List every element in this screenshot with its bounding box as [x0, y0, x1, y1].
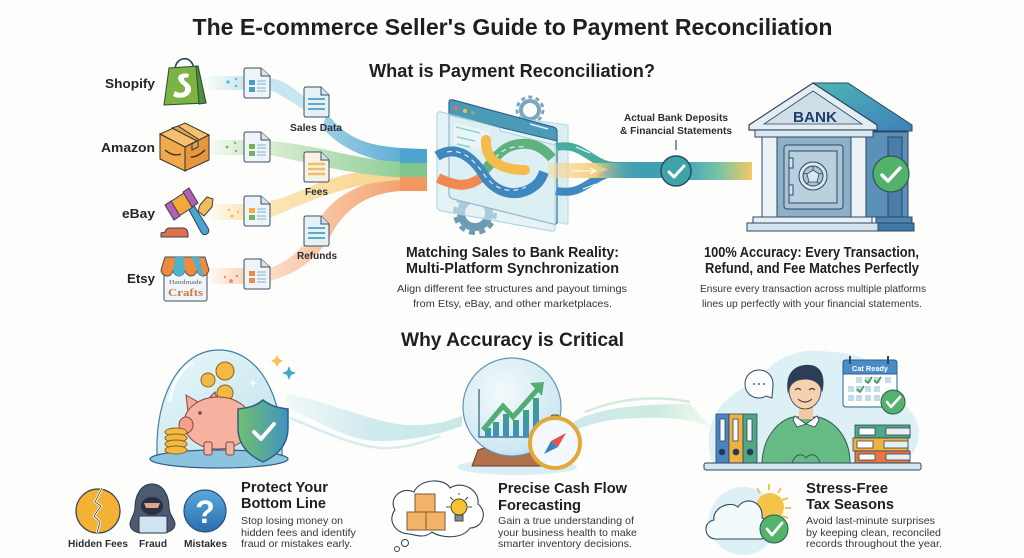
heading block: accuracy: 100% Accuracy: Every Transaction, — [704, 245, 919, 261]
illustration: relaxed person at desk — [704, 351, 921, 470]
person — [762, 365, 850, 463]
panel: reconciliation software window — [437, 100, 568, 231]
heading block: precise cash flow forecasting — [498, 480, 627, 514]
compass — [530, 415, 580, 468]
blue road — [437, 151, 544, 193]
dots: data particles — [224, 78, 239, 283]
data flow streams — [208, 76, 427, 284]
text: forecast description: smarter inventory decisions. — [498, 538, 632, 550]
dome base — [150, 450, 288, 468]
text: matching sales description: from Etsy, eBay, and other marketplaces. — [413, 298, 612, 310]
illustration: piggy bank under glass dome — [150, 350, 296, 468]
icon: bank building — [747, 83, 914, 231]
gear: bottom — [455, 193, 495, 233]
yellow road — [486, 140, 525, 170]
heading block: precise cash flow forecasting: Forecasting — [498, 497, 581, 514]
sparkles — [249, 355, 296, 387]
label: mistakes: Mistakes — [184, 539, 227, 550]
icon: checkpoint check — [661, 156, 691, 186]
calendar title: Cat Ready — [852, 366, 888, 373]
label: Shopify: Shopify — [105, 76, 156, 91]
heading: what is payment reconciliation: What is Payment Reconciliation? — [369, 61, 655, 81]
stacked books — [853, 425, 910, 463]
text: tax description — [806, 515, 942, 550]
heading block: precise cash flow forecasting: Precise Cash Flow — [498, 480, 627, 497]
heading block: matching sales — [406, 245, 619, 277]
light bulb — [446, 493, 472, 521]
glass dome — [157, 350, 282, 455]
doc: ebay report — [244, 196, 270, 226]
label: hidden fees: Hidden Fees — [68, 539, 128, 550]
label: Etsy: Etsy — [127, 271, 156, 286]
text: forecast description — [498, 515, 637, 550]
text: accuracy description: Ensure every transaction across multiple platforms — [700, 283, 926, 295]
icon: cloud with sun and check — [706, 484, 791, 555]
text: tax description: by keeping clean, reconciled — [806, 527, 941, 539]
doc: refunds — [304, 216, 329, 246]
heading: why accuracy is critical: Why Accuracy is Critical — [401, 330, 624, 351]
text: protect description: hidden fees and identify — [241, 527, 357, 539]
doc: amazon report — [244, 132, 270, 162]
callout: actual bank deposits label: & Financial Statements — [620, 126, 732, 137]
icon: etsy storefront — [161, 257, 209, 301]
text: accuracy description: lines up perfectly with your financial statements. — [702, 298, 922, 310]
desk — [704, 463, 921, 470]
text: tax description: records throughout the year. — [806, 538, 942, 550]
label: fraud: Fraud — [139, 539, 167, 550]
doc: fees — [304, 152, 329, 182]
coins falling — [201, 362, 234, 401]
icon: amazon box — [160, 123, 209, 171]
binders — [716, 414, 757, 463]
illustration: crystal ball forecast — [457, 358, 580, 475]
growth arrow — [483, 390, 537, 430]
icon: fraud hacker — [130, 484, 175, 533]
heading block: matching sales: Matching Sales to Bank Reality: — [406, 245, 619, 261]
callout: actual bank deposits label: Actual Bank Deposits — [624, 113, 728, 124]
boxes — [407, 494, 445, 530]
calendar — [843, 356, 905, 414]
label: sales data: Sales Data — [290, 123, 342, 134]
label: eBay: eBay — [122, 206, 156, 221]
bank sign: BANK — [793, 109, 837, 126]
shield — [238, 400, 288, 462]
bank verified check — [873, 156, 909, 192]
text: forecast description: your business health to make — [498, 527, 637, 539]
heading block: protect your bottom line: Bottom Line — [241, 495, 326, 512]
text: matching sales description: Align different fee structures and payout timings — [397, 283, 627, 295]
connecting waves — [285, 394, 712, 448]
label: fees: Fees — [305, 187, 328, 198]
text: protect description — [241, 515, 357, 550]
text: protect description: fraud or mistakes early. — [241, 538, 352, 550]
green road — [483, 144, 552, 172]
icon: hidden fees cracked coin — [76, 488, 120, 533]
icon: mistakes question — [184, 490, 226, 532]
orange road — [438, 172, 487, 185]
shop sign: handmade: Handmade — [169, 279, 202, 286]
icon: shopify bag — [164, 59, 206, 105]
coin stack — [165, 428, 187, 454]
piggy bank — [179, 392, 252, 455]
heading block: stress-free tax seasons: Stress-Free — [806, 480, 888, 497]
heading block: protect your bottom line — [241, 479, 328, 512]
heading block: stress-free tax seasons: Tax Seasons — [806, 496, 894, 513]
text: tax description: Avoid last-minute surprises — [806, 515, 935, 527]
doc: shopify report — [244, 68, 270, 98]
icon: thought cloud with boxes and bulb — [392, 481, 483, 552]
bar chart — [485, 398, 539, 437]
text: accuracy description — [700, 283, 926, 310]
heading block: accuracy: Refund, and Fee Matches Perfectly — [705, 261, 919, 277]
gear: top — [517, 97, 543, 123]
heading block: matching sales: Multi-Platform Synchronization — [406, 261, 619, 277]
heading block: stress-free tax seasons — [806, 480, 894, 513]
doc: etsy report — [244, 259, 270, 289]
doc: sales data — [304, 87, 329, 117]
icon: mistakes question: ? — [195, 494, 215, 530]
output streams — [548, 146, 752, 192]
callout: actual bank deposits label — [620, 113, 732, 150]
heading block: protect your bottom line: Protect Your — [241, 479, 328, 496]
text: matching sales description — [397, 283, 627, 310]
heading block: accuracy — [704, 245, 919, 277]
background blob — [709, 351, 919, 463]
text: protect description: Stop losing money on — [241, 515, 343, 527]
label: Amazon: Amazon — [101, 140, 155, 155]
calendar grid — [848, 377, 891, 401]
speech bubble — [745, 370, 773, 398]
title: The E-commerce Seller's Guide to Payment Reconciliation — [192, 14, 832, 40]
shop sign: crafts: Crafts — [168, 287, 204, 299]
label: refunds: Refunds — [297, 251, 337, 262]
text: forecast description: Gain a true understanding of — [498, 515, 634, 527]
icon: ebay gavel — [161, 188, 213, 237]
